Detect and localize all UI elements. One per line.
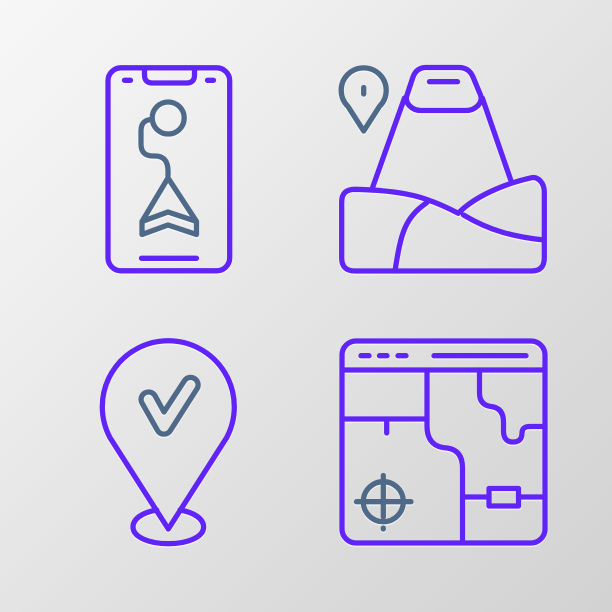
terrain outline bbox=[342, 178, 544, 271]
phone speaker left bbox=[124, 78, 130, 83]
route start circle bbox=[152, 102, 184, 134]
crosshair horizontal line bbox=[356, 499, 411, 504]
crosshair ring bbox=[363, 482, 403, 522]
lid slot bbox=[430, 79, 458, 84]
map road centre bbox=[427, 419, 462, 543]
address bar bbox=[434, 353, 526, 358]
icon: browser window with map bbox=[342, 341, 545, 543]
phone body bbox=[108, 68, 230, 271]
crosshair target bbox=[356, 476, 411, 529]
icon: smartphone with navigation route bbox=[108, 68, 230, 271]
navigation arrow bbox=[142, 178, 196, 234]
map stub bbox=[384, 419, 389, 433]
ground ellipse bbox=[133, 510, 204, 544]
right beam line bbox=[482, 98, 511, 180]
projector lid bbox=[406, 68, 481, 110]
left beam line bbox=[372, 98, 404, 190]
small pin dot bbox=[361, 88, 366, 94]
small map pin bbox=[341, 68, 386, 131]
terrain ridge right bbox=[464, 215, 544, 240]
phone speaker right bbox=[208, 78, 214, 83]
icon: location beam over terrain map bbox=[341, 68, 544, 271]
route line bbox=[141, 120, 168, 176]
crosshair vertical line bbox=[381, 476, 386, 529]
phone notch bbox=[144, 68, 194, 83]
icon: location pin with check mark bbox=[102, 341, 234, 544]
map road lower right right part bbox=[518, 494, 545, 500]
pin outline bbox=[102, 341, 234, 529]
check mark bbox=[141, 377, 198, 434]
title bar dots bbox=[361, 353, 406, 358]
map road lower right left part bbox=[462, 494, 489, 500]
terrain ridge left bbox=[395, 203, 427, 271]
phone home bar bbox=[142, 256, 196, 261]
map road upper right bbox=[480, 370, 545, 442]
map label box bbox=[489, 488, 518, 506]
map block top left bbox=[342, 370, 427, 419]
title bar divider bbox=[342, 367, 545, 373]
window frame bbox=[342, 341, 545, 543]
